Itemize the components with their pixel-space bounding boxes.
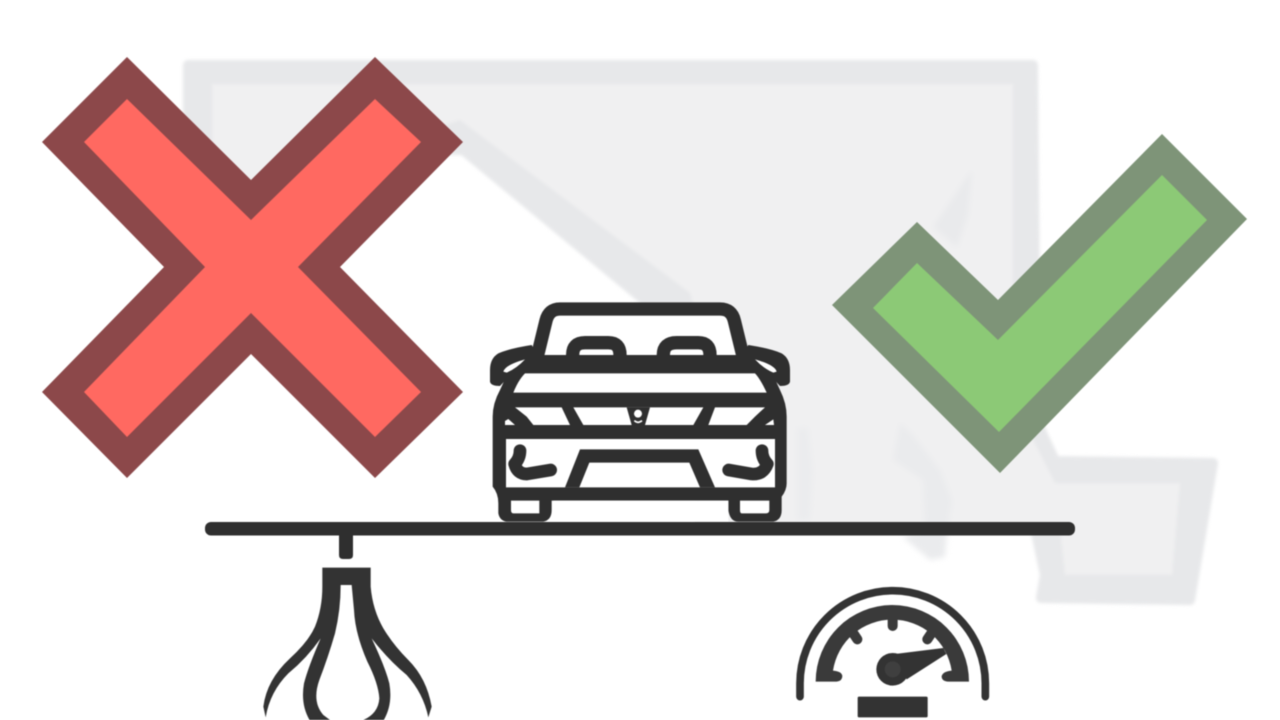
- gauge inner arc: [816, 605, 969, 682]
- gauge needle: [895, 648, 946, 679]
- car cabin and windshield: [536, 309, 744, 362]
- icon: red cross: [42, 57, 463, 478]
- icon: fulcrum bulb nozzle: [263, 568, 432, 720]
- car lower intake: [565, 449, 715, 487]
- car headrests: [573, 343, 710, 362]
- gauge readout: [858, 697, 928, 717]
- beam support stem: [339, 530, 353, 559]
- car windows and panels: [503, 359, 777, 522]
- background: grey map shape: [188, 65, 1213, 600]
- icon: speedometer gauge: [800, 591, 985, 717]
- balance beam: [205, 522, 1075, 536]
- gauge outer arc: [800, 591, 985, 697]
- car headlights: [515, 451, 767, 474]
- car body: [493, 361, 787, 522]
- icon: car front view: [490, 309, 790, 522]
- gauge tick marks: [853, 620, 931, 639]
- icon: green check mark: [832, 134, 1247, 473]
- car mirrors: [490, 345, 790, 386]
- car grille emblem: [627, 407, 650, 425]
- gauge hub: [876, 653, 909, 686]
